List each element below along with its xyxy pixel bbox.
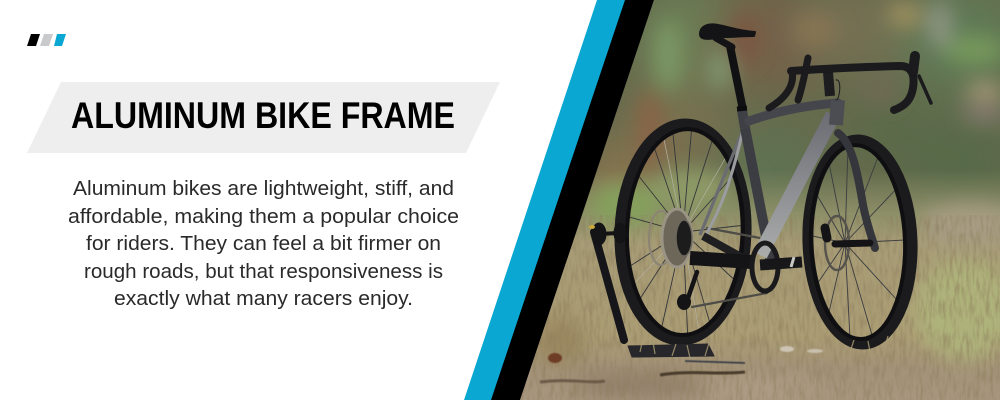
rear wheel tire bbox=[616, 122, 750, 342]
text block: description: affordable, making them a popular choice bbox=[68, 206, 459, 228]
front wheel tire bbox=[804, 138, 916, 346]
handlebar bbox=[769, 56, 931, 110]
heading: title band: ALUMINUM BIKE FRAME bbox=[71, 95, 455, 136]
rear derailleur bbox=[678, 272, 697, 309]
head tube and stem bbox=[828, 72, 838, 125]
saddle bbox=[700, 24, 755, 47]
icon: three slanted accent marks bbox=[27, 34, 66, 46]
front wheel spokes bbox=[813, 154, 903, 334]
diagonal stripe: black bbox=[491, 0, 654, 400]
bike bbox=[589, 24, 931, 357]
heading: title band bbox=[27, 82, 500, 153]
photo background: grass and dirt ground bbox=[510, 168, 1000, 400]
down tube bbox=[760, 115, 833, 255]
rear disc and cassette bbox=[649, 209, 692, 267]
fallen leaves and debris bbox=[540, 346, 823, 382]
chainring and crank bbox=[752, 243, 802, 291]
text block: description bbox=[68, 178, 459, 310]
chain bbox=[692, 228, 767, 307]
photo: aluminum gravel bike in a field bbox=[510, 0, 1000, 400]
text block: description: rough roads, but that responsiveness is bbox=[84, 261, 443, 283]
seat tube and post bbox=[730, 46, 771, 262]
bike stand bbox=[589, 223, 714, 357]
seat stay and chain stay bbox=[690, 130, 752, 263]
text block: description: exactly what many racers enjoy. bbox=[114, 288, 413, 310]
fork bbox=[838, 133, 875, 248]
grass overlapping the wheels bbox=[640, 336, 888, 357]
top tube bbox=[749, 103, 838, 121]
rear wheel spokes bbox=[630, 132, 740, 333]
text block: description: for riders. They can feel a bit firmer on bbox=[86, 233, 441, 255]
front brake caliper and hub bbox=[825, 228, 870, 244]
front disc bbox=[825, 216, 849, 270]
diagonal stripe: blue bbox=[464, 0, 626, 400]
photo background: blurred foliage bbox=[567, 0, 1000, 260]
text block: description: Aluminum bikes are lightweight, stiff, and bbox=[73, 178, 454, 200]
